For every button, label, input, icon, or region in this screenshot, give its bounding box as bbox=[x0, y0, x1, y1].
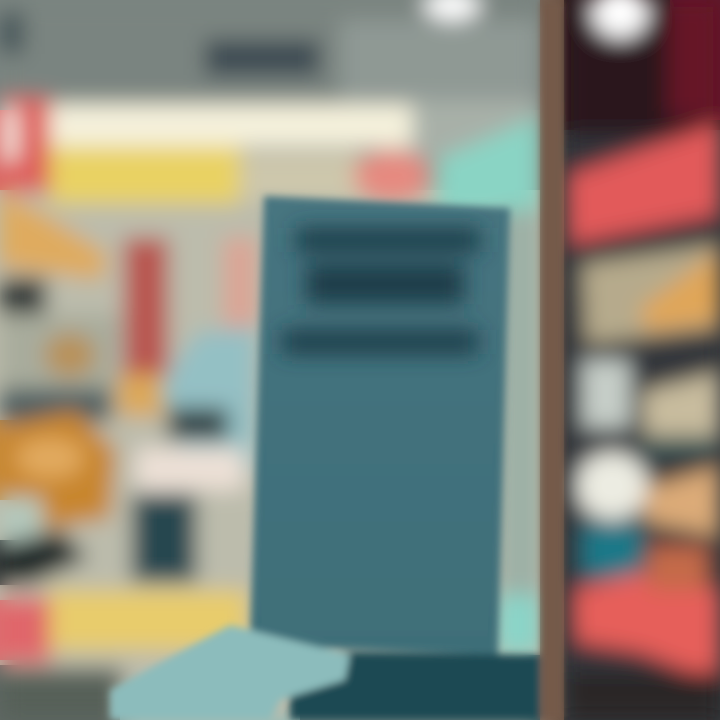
upper products bbox=[582, 244, 720, 344]
centre-left aisle figure bbox=[124, 238, 168, 380]
middle products bbox=[582, 360, 630, 428]
red bottom sign bbox=[574, 570, 720, 684]
left store signage bbox=[50, 104, 412, 148]
red shelf sign bbox=[568, 122, 720, 244]
left shelf products bbox=[0, 192, 108, 280]
lower-left signage bbox=[48, 590, 248, 650]
board heading haze bbox=[282, 228, 480, 354]
wooden pillar bbox=[541, 0, 563, 720]
ceiling vents bbox=[205, 40, 320, 76]
front layer: sharper board, pillar and paper bbox=[110, 0, 563, 720]
foreground bbox=[495, 595, 541, 655]
panel: blank teal board bbox=[250, 196, 510, 655]
aisle edge behind board bbox=[500, 210, 540, 650]
paper corner bbox=[110, 625, 350, 720]
dark bottom foreground bbox=[290, 652, 540, 720]
lights bbox=[424, 0, 480, 20]
right unit bbox=[564, 0, 720, 720]
lower products bbox=[576, 452, 648, 520]
